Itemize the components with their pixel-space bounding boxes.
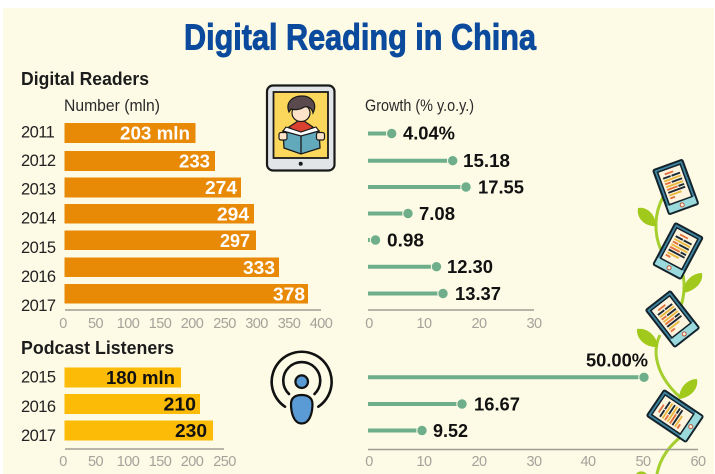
- axis: podcast listeners growth: [365, 450, 706, 470]
- leaf: [683, 273, 702, 293]
- leaf: [637, 329, 658, 347]
- axis: digital readers growth: [365, 310, 542, 332]
- heading: digital readers: Digital Readers: [21, 68, 149, 89]
- year labels: digital readers: [21, 123, 56, 315]
- lollipop chart: digital readers growth: 7.08: [419, 203, 455, 224]
- year labels: digital readers: 2011: [21, 123, 55, 141]
- icon: tablet reader: [267, 86, 334, 170]
- axis: digital readers number: 150: [149, 316, 172, 332]
- lollipop chart: digital readers growth: 15.18: [463, 150, 510, 171]
- axis: podcast listeners number: 50: [88, 454, 103, 470]
- label: number: Number (mln): [64, 97, 160, 115]
- axis: podcast listeners number: 250: [213, 454, 236, 470]
- axis: digital readers number: 300: [245, 316, 268, 332]
- axis: podcast listeners growth: 40: [581, 454, 596, 470]
- axis: podcast listeners number: 0: [59, 454, 67, 470]
- axis: podcast listeners growth: 60: [691, 454, 706, 470]
- lollipop chart: digital readers growth: 17.55: [478, 176, 524, 198]
- year labels: digital readers: 2014: [21, 210, 56, 228]
- axis: digital readers number: [59, 310, 333, 332]
- axis: digital readers growth: 0: [365, 316, 373, 332]
- title: Digital Reading in China: [184, 16, 537, 58]
- lollipop chart: digital readers growth: 12.30: [447, 256, 493, 277]
- axis: podcast listeners growth: 0: [365, 454, 373, 470]
- bar chart: podcast listeners number: [64, 367, 213, 441]
- bar chart: podcast listeners number: 210: [164, 394, 196, 414]
- axis: digital readers growth: 10: [417, 316, 432, 332]
- lollipop chart: podcast listeners growth: [368, 350, 649, 441]
- bar chart: digital readers number: 203 mln: [120, 122, 190, 144]
- lollipop chart: digital readers growth: 13.37: [455, 283, 501, 304]
- tablet 4: [647, 390, 703, 442]
- axis: digital readers growth: 20: [472, 316, 487, 332]
- heading: podcast listeners: Podcast Listeners: [21, 337, 174, 358]
- year labels: digital readers: 2015: [21, 239, 56, 257]
- axis: digital readers growth: 30: [527, 316, 542, 332]
- lollipop chart: podcast listeners growth: 50.00%: [586, 350, 648, 370]
- year labels: digital readers: 2016: [21, 268, 56, 286]
- bar chart: digital readers number: 297: [220, 230, 250, 251]
- year labels: digital readers: 2012: [21, 152, 56, 170]
- bar chart: digital readers number: 294: [217, 204, 250, 224]
- year labels: digital readers: 2013: [21, 180, 56, 198]
- icon: podcast: [272, 352, 332, 424]
- lollipop chart: podcast listeners growth: 16.67: [474, 394, 520, 414]
- axis: digital readers number: 50: [88, 316, 103, 332]
- bar chart: digital readers number: [64, 122, 308, 304]
- axis: digital readers number: 100: [117, 316, 140, 332]
- year labels: digital readers: 2017: [21, 297, 56, 315]
- bar chart: digital readers number: 378: [273, 284, 305, 304]
- axis: podcast listeners number: [59, 449, 236, 470]
- axis: podcast listeners growth: 30: [527, 454, 542, 470]
- year labels: podcast listeners: [21, 368, 56, 445]
- year labels: podcast listeners: 2015: [21, 368, 56, 386]
- axis: podcast listeners growth: 50: [636, 454, 651, 470]
- axis: digital readers number: 200: [181, 316, 204, 332]
- axis: podcast listeners number: 100: [117, 454, 140, 470]
- tablet 1: [653, 160, 698, 214]
- year labels: podcast listeners: 2017: [21, 427, 56, 445]
- axis: podcast listeners number: 200: [181, 454, 204, 470]
- axis: digital readers number: 400: [310, 316, 333, 332]
- lollipop chart: digital readers growth: 4.04%: [403, 122, 455, 144]
- bar chart: digital readers number: 333: [243, 257, 275, 278]
- lollipop chart: digital readers growth: 0.98: [387, 230, 424, 250]
- label: growth: Growth (% y.o.y.): [365, 97, 474, 115]
- bar chart: podcast listeners number: 230: [175, 420, 207, 441]
- leaf: [679, 379, 697, 399]
- vine with leaves and tablets: [636, 160, 703, 474]
- axis: podcast listeners growth: 10: [417, 454, 432, 470]
- leaf: [636, 471, 647, 474]
- bar chart: podcast listeners number: 180 mln: [106, 367, 175, 388]
- leaf: [638, 208, 656, 226]
- lollipop chart: digital readers growth: [368, 122, 524, 304]
- axis: podcast listeners number: 150: [149, 454, 172, 470]
- bar chart: digital readers number: 274: [205, 177, 238, 198]
- lollipop chart: podcast listeners growth: 9.52: [433, 420, 468, 441]
- axis: digital readers number: 250: [213, 316, 236, 332]
- year labels: podcast listeners: 2016: [21, 398, 56, 416]
- axis: digital readers number: 0: [59, 316, 67, 332]
- axis: podcast listeners growth: 20: [472, 454, 487, 470]
- bar chart: digital readers number: 233: [179, 150, 210, 172]
- tablet 2: [653, 223, 703, 279]
- axis: digital readers number: 350: [278, 316, 301, 332]
- tablet 3: [646, 291, 699, 347]
